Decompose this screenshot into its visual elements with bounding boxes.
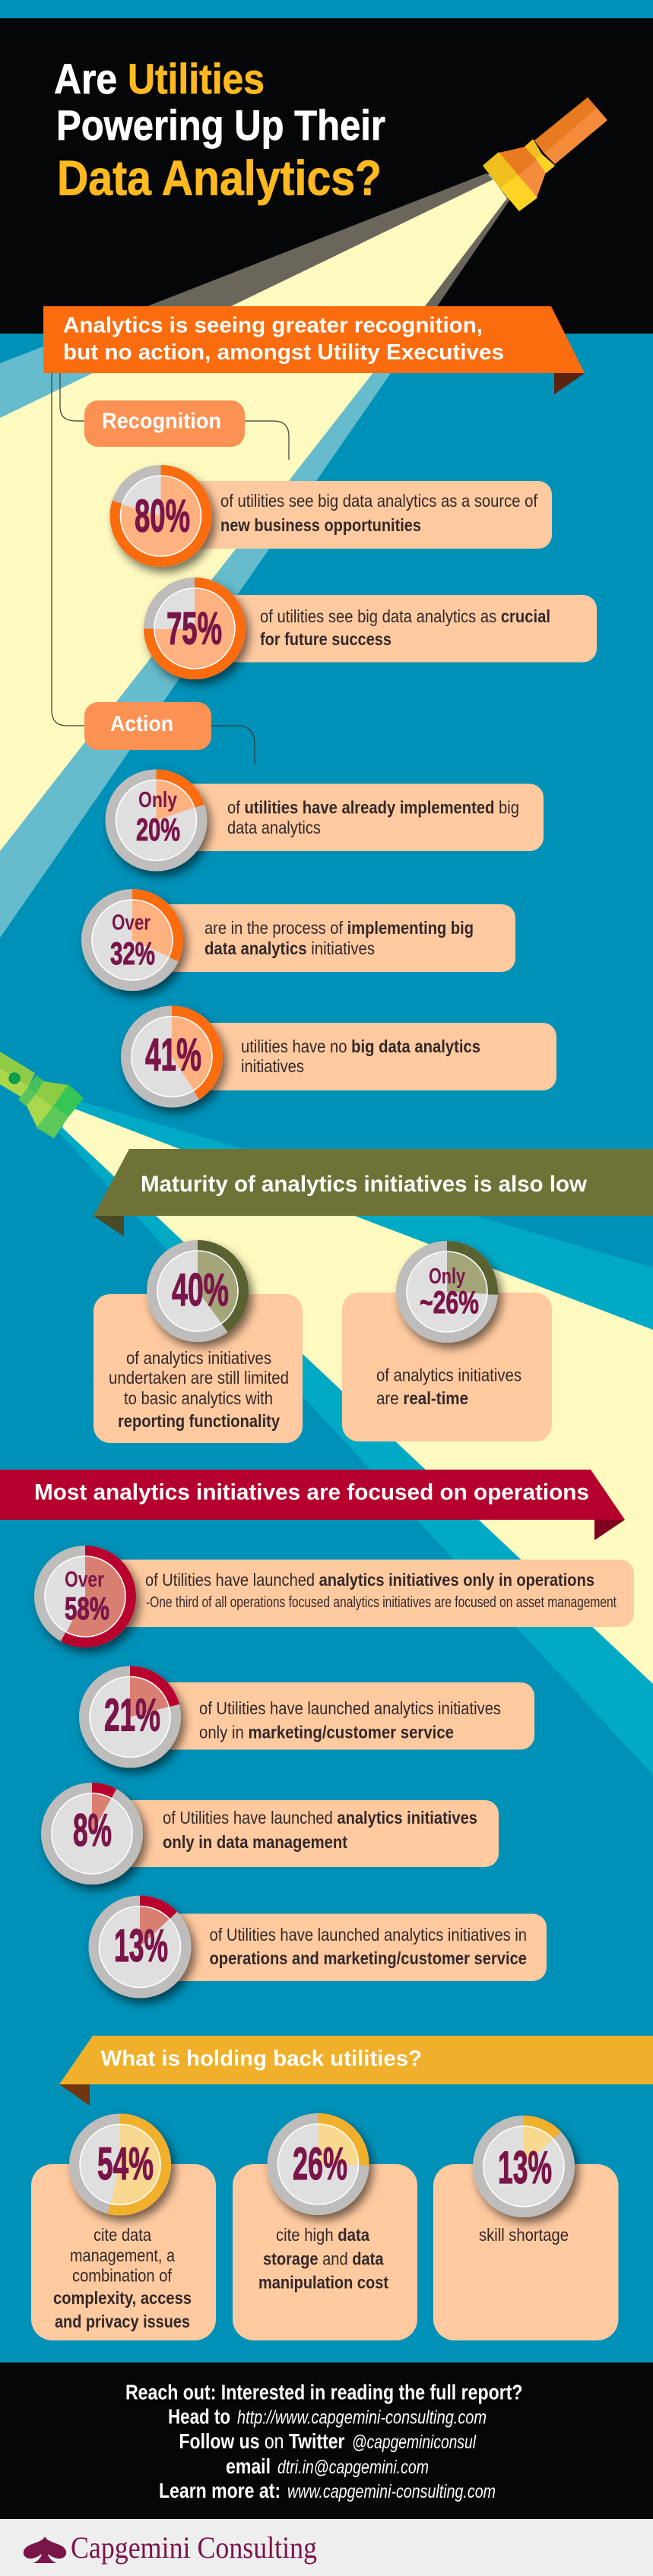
maturity card: only 26% — [342, 1241, 552, 1441]
maturity card: only 26%: ~26% — [420, 1284, 479, 1320]
section banner: what is holding back — [59, 2036, 653, 2106]
stat card: 13%: operations and marketing/customer service — [210, 1948, 527, 1968]
stat card: 75%: for future success — [260, 629, 391, 649]
stat card: 21% — [79, 1666, 534, 1767]
section banner: maturity: Maturity of analytics initiatives is also low — [141, 1172, 588, 1197]
orange flashlight beam — [0, 173, 511, 938]
barrier card: 13%: 13% — [498, 2142, 552, 2193]
barrier card: 54% — [31, 2114, 216, 2340]
maturity card: 40%: 40% — [172, 1264, 229, 1315]
maturity card: only 26%: of analytics initiatives — [376, 1365, 521, 1385]
footer: logo strip: Capgemini Consulting — [71, 2530, 317, 2565]
title: Are Utilities — [54, 55, 265, 103]
action pill — [84, 702, 211, 750]
icon: orange flashlight — [483, 98, 607, 210]
footer: contact information: Follow us on Twitter — [179, 2429, 345, 2453]
footer: contact information: www.capgemini-consulting.com — [287, 2481, 496, 2502]
footer: contact information: Head to — [168, 2404, 230, 2429]
barrier card: 26%: 26% — [293, 2138, 347, 2189]
stat card: over 32% — [81, 889, 515, 991]
stat card: over 58%: Over — [65, 1568, 104, 1592]
title: Data Analytics? — [57, 150, 382, 205]
stat card: over 32%: are in the process of implementing big — [204, 918, 474, 938]
section banner: recognition vs action — [43, 306, 585, 394]
barrier card: 26%: cite high data — [276, 2225, 370, 2245]
title: Powering Up Their — [56, 101, 385, 149]
stat card: over 32%: data analytics initiatives — [204, 938, 375, 958]
barrier card: 54%: combination of — [72, 2266, 172, 2286]
stat card: 13% — [88, 1895, 547, 1998]
green flashlight beam — [59, 1101, 653, 1775]
stat card: 75%: 75% — [166, 603, 222, 653]
barrier card: 54%: 54% — [97, 2138, 154, 2189]
maturity card: only 26%: are real-time — [376, 1388, 468, 1408]
stat card: over 58%: of Utilities have launched analytics initiatives only in operations — [145, 1570, 594, 1590]
section banner: operations: Most analytics initiatives are focused on operations — [34, 1480, 589, 1505]
stat card: only 20% — [105, 769, 544, 871]
barrier card: 54%: complexity, access — [53, 2288, 192, 2308]
section banner: recognition vs action: Analytics is seeing greater recognition, — [63, 313, 483, 337]
stat card: over 58% — [34, 1546, 634, 1647]
stat card: 8% — [41, 1783, 499, 1885]
barrier card: 26% — [233, 2113, 417, 2340]
section banner: maturity — [94, 1149, 653, 1236]
barrier card: 26%: storage and data — [263, 2249, 384, 2269]
stat card: 8%: of Utilities have launched analytics initiatives — [163, 1808, 477, 1828]
stat card: 21%: only in marketing/customer service — [199, 1722, 454, 1742]
stat card: 41%: utilities have no big data analytics — [241, 1036, 480, 1056]
barrier card: 54%: management, a — [70, 2245, 176, 2265]
footer: contact information: Reach out: Interested in reading the full report? — [125, 2380, 523, 2404]
maturity card: only 26%: Only — [429, 1264, 465, 1289]
footer: contact information: email — [226, 2454, 271, 2478]
stat card: 80% — [109, 465, 552, 567]
footer: contact information: dtri.in@capgemini.com — [277, 2457, 429, 2478]
stat card: over 32%: Over — [112, 910, 151, 935]
action pill: Action — [110, 712, 173, 736]
stat card: only 20%: of utilities have already implemented big — [227, 798, 519, 818]
maturity card: 40%: reporting functionality — [118, 1411, 280, 1431]
header black panel — [0, 18, 653, 334]
section banner: what is holding back: What is holding back utilities? — [100, 2047, 422, 2071]
connector lines — [52, 373, 289, 764]
footer: contact information: Learn more at: — [159, 2479, 281, 2502]
maturity card: 40%: undertaken are still limited — [109, 1368, 289, 1388]
stat card: only 20%: 20% — [136, 812, 180, 847]
stat card: 75%: of utilities see big data analytics as crucial — [260, 606, 550, 626]
barrier card: 13%: skill shortage — [479, 2225, 569, 2245]
stat card: 80%: new business opportunities — [220, 515, 421, 535]
footer: contact information: http://www.capgemini-consulting.com — [237, 2407, 487, 2429]
maturity card: 40% — [94, 1240, 303, 1443]
barrier card: 13% — [433, 2116, 619, 2340]
stat card: 21%: 21% — [104, 1690, 160, 1740]
footer: logo strip — [0, 2519, 653, 2576]
stat card: over 32%: 32% — [110, 935, 155, 971]
stat card: 80%: 80% — [135, 491, 190, 541]
stat card: 41%: initiatives — [241, 1056, 304, 1076]
section banner: operations — [0, 1470, 625, 1540]
stat card: 13%: 13% — [114, 1920, 168, 1971]
stat card: 41% — [121, 1006, 556, 1108]
stat card: 13%: of Utilities have launched analytics initiatives in — [210, 1925, 527, 1945]
stat card: only 20%: Only — [138, 788, 177, 812]
footer: contact information: @capgeminiconsul — [352, 2432, 477, 2453]
stat card: over 58%: 58% — [65, 1590, 109, 1626]
recognition pill — [84, 400, 245, 447]
stat card: 80%: of utilities see big data analytics as a source of — [220, 491, 537, 511]
stat card: only 20%: data analytics — [227, 818, 321, 837]
recognition pill: Recognition — [102, 409, 221, 433]
barrier card: 54%: cite data — [94, 2225, 152, 2245]
maturity card: 40%: to basic analytics with — [124, 1388, 273, 1408]
icon: green flashlight — [0, 1052, 83, 1138]
maturity card: 40%: of analytics initiatives — [126, 1348, 271, 1368]
stat card: 41%: 41% — [145, 1029, 201, 1081]
stat card: 21%: of Utilities have launched analytics initiatives — [199, 1698, 501, 1718]
barrier card: 54%: and privacy issues — [55, 2312, 190, 2331]
section banner: recognition vs action: but no action, amongst Utility Executives — [63, 340, 504, 365]
stat card: 8%: 8% — [73, 1805, 112, 1856]
barrier card: 26%: manipulation cost — [258, 2272, 388, 2292]
footer: contact information — [0, 2362, 653, 2519]
title — [54, 55, 385, 205]
stat card: 75% — [144, 578, 597, 679]
stat card: 8%: only in data management — [163, 1832, 347, 1852]
